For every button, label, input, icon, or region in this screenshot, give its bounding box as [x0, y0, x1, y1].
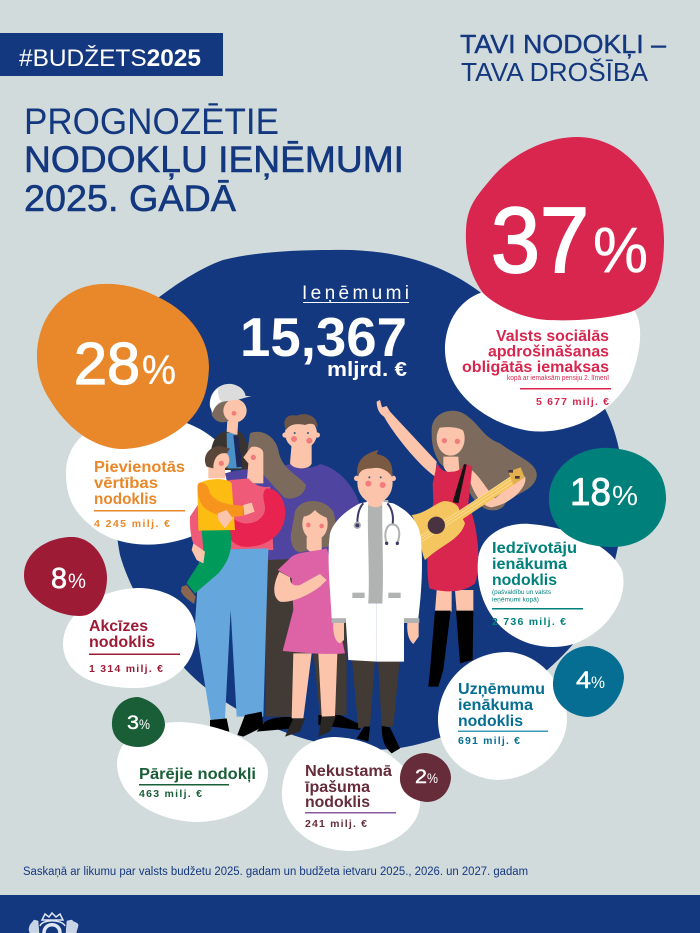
footnote: Saskaņā ar likumu par valsts budžetu 2025. gadam un budžeta ietvaru 2025., 2026. un 2027. gadam: [23, 866, 528, 878]
person: doctor: [329, 450, 422, 753]
person: singer with guitar: [377, 400, 537, 687]
text: VAT: nodoklis: [94, 491, 157, 508]
text: VAT: vērtības: [94, 475, 158, 492]
blob: 2%: 2: [415, 767, 427, 788]
blob: 2%: [400, 753, 451, 802]
slogan: TAVI NODOKĻI –: [460, 29, 667, 59]
panel white: corporate tax: [438, 652, 567, 780]
text: VAT: Pievienotās: [94, 459, 185, 476]
text: property tax: īpašuma: [304, 779, 370, 796]
person: man in purple sweater: [225, 414, 362, 732]
blob: 4%: %: [591, 673, 605, 692]
blob: 18%: %: [612, 480, 638, 511]
person: girl in pink dress: [274, 501, 345, 737]
panel white: other taxes: [117, 722, 268, 822]
panel white: excise: [63, 588, 196, 688]
text: personal income tax: 2 736 milj. €: [492, 616, 566, 628]
blob: 28%: %: [142, 347, 176, 393]
text: property tax: [304, 763, 396, 830]
person: toddler: [181, 446, 255, 604]
blob: 28%: [37, 284, 209, 449]
text: social contributions: obligātās iemaksas: [462, 359, 609, 376]
text: personal income tax: nodoklis: [492, 572, 557, 589]
text: social contributions: kopā ar iemaksām pensiju 2. līmenī: [507, 375, 609, 382]
icon: coat of arms: [29, 913, 78, 933]
blob: 2%: %: [427, 770, 438, 786]
blob: 8%: [24, 537, 107, 616]
text: corporate tax: ienākuma: [458, 697, 533, 714]
total revenue: mljrd. €: [327, 359, 407, 381]
text: corporate tax: nodoklis: [458, 713, 523, 730]
text: personal income tax: Iedzīvotāju: [492, 540, 577, 557]
text: social contributions: 5 677 milj. €: [536, 396, 609, 408]
title: NODOKĻU IEŅĒMUMI: [24, 139, 404, 180]
text: excise: 1 314 milj. €: [89, 663, 163, 675]
title: 2025. GADĀ: [24, 178, 236, 219]
blob: 37%: %: [593, 214, 648, 286]
text: corporate tax: Uzņēmumu: [458, 681, 545, 698]
blob: 8%: 8: [51, 563, 67, 595]
text: excise: Akcīzes: [89, 618, 148, 635]
text: social contributions: Valsts sociālās: [496, 328, 609, 345]
slogan: [460, 29, 667, 87]
footer band: [0, 895, 700, 933]
blob: 3%: [112, 697, 165, 747]
text: property tax: Nekustamā: [305, 763, 392, 780]
total revenue: 15,367: [240, 306, 407, 368]
text: social contributions: [462, 328, 611, 408]
navy central blob: [112, 250, 623, 750]
title: PROGNOZĒTIE: [24, 101, 279, 142]
text: corporate tax: [458, 681, 548, 747]
text: property tax: 241 milj. €: [305, 818, 367, 830]
header tag: #BUDŽETS2025: [0, 33, 223, 76]
text: other taxes: 463 milj. €: [139, 788, 202, 800]
text: excise: nodoklis: [89, 634, 155, 651]
blob: 4%: 4: [576, 667, 591, 694]
blob: 3%: %: [139, 716, 150, 732]
illustration: people: [181, 384, 537, 753]
blob: 3%: 3: [127, 713, 139, 734]
blob: 18%: [549, 448, 666, 547]
text: property tax: nodoklis: [305, 794, 370, 811]
blob: 37%: 37: [491, 188, 589, 292]
title: [24, 101, 404, 219]
person: man with hard hat: [210, 384, 251, 470]
total revenue: Ieņēmumi: [302, 283, 409, 304]
text: other taxes: [139, 766, 256, 800]
panel white: VAT: [66, 416, 231, 545]
text: personal income tax: (pašvaldību un valsts: [492, 589, 552, 596]
panel white: personal income tax: [478, 524, 623, 647]
blob: 37%: [466, 137, 664, 320]
blob: 4%: [553, 646, 624, 717]
blob: 8%: %: [68, 570, 86, 593]
header tag: #BUDŽETS2025: #BUDŽETS2025: [19, 45, 201, 72]
blob: 18%: 18: [570, 471, 611, 514]
text: other taxes: Pārējie nodokļi: [139, 766, 256, 783]
text: personal income tax: ienākuma: [492, 556, 567, 573]
panel white: social contributions: [445, 290, 640, 432]
text: social contributions: apdrošināšanas: [488, 344, 609, 360]
text: excise: [89, 618, 180, 675]
total revenue: [240, 283, 409, 381]
blob: 28%: 28: [74, 331, 140, 397]
text: VAT: 4 245 milj. €: [94, 518, 170, 530]
panel white: property tax: [282, 737, 420, 851]
text: personal income tax: ieņēmumi kopā): [492, 596, 539, 604]
text: VAT: [94, 459, 185, 530]
person: woman holding child: [190, 432, 306, 737]
text: personal income tax: [492, 540, 583, 628]
slogan: TAVA DROŠĪBA: [461, 57, 649, 87]
text: corporate tax: 691 milj. €: [458, 735, 520, 747]
